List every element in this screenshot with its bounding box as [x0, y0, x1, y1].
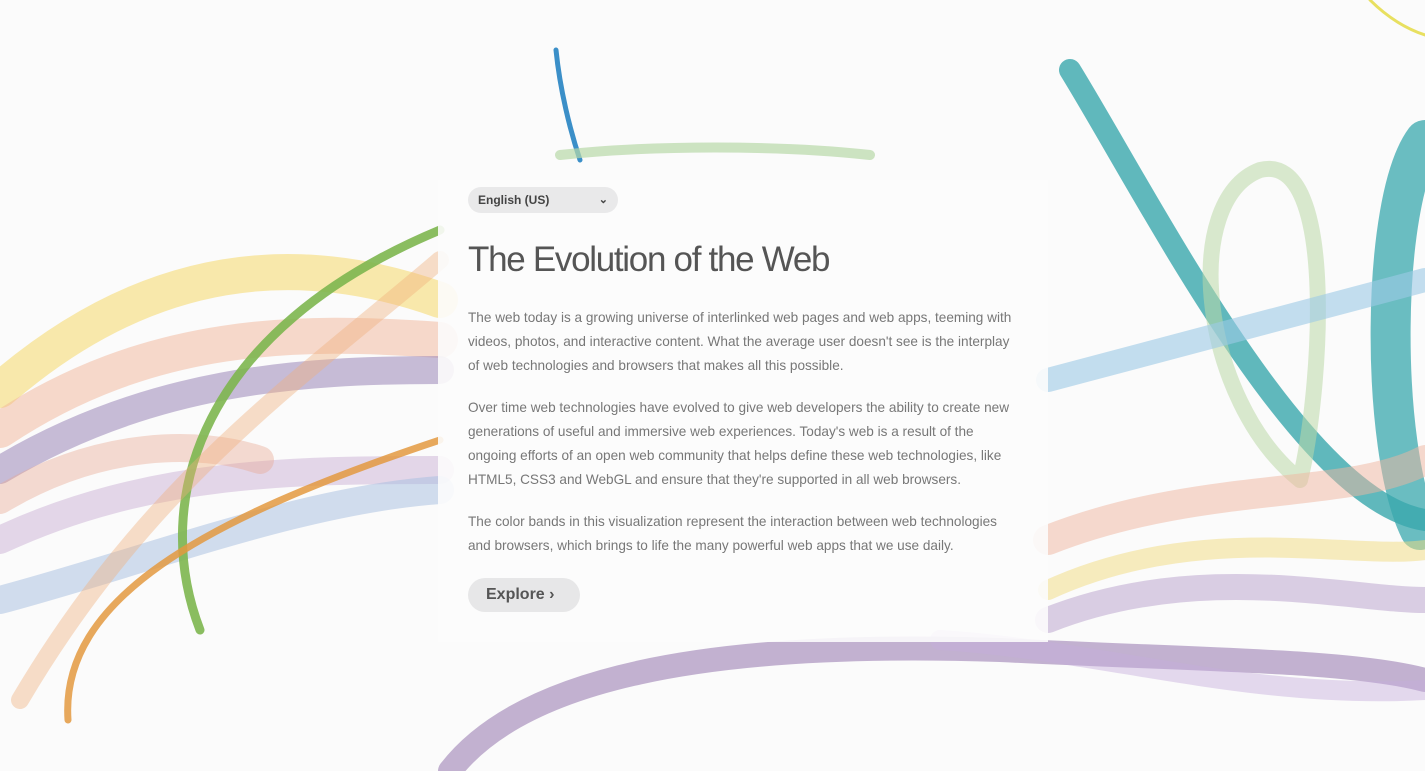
text block: intro paragraphs: ongoing efforts of an open web community that helps define these web technologies, like: [468, 448, 1001, 463]
text block: intro paragraphs: The color bands in this visualization represent the interaction between web technologies: [468, 514, 997, 529]
language selector: ⌄: [599, 194, 608, 206]
text block: intro paragraphs: The web today is a growing universe of interlinked web pages and web apps, teeming with: [468, 310, 1011, 325]
text block: intro paragraphs: of web technologies and browsers that makes all this possible.: [468, 358, 844, 373]
panel: intro: [438, 180, 1048, 642]
explore button: [468, 578, 580, 612]
language selector: English (US): [478, 193, 549, 207]
title: The Evolution of the Web: [468, 240, 829, 279]
text block: intro paragraphs: and browsers, which brings to life the many powerful web apps that we use daily.: [468, 538, 954, 553]
text block: intro paragraphs: videos, photos, and interactive content. What the average user doesn't see is the interplay: [468, 334, 1009, 349]
text block: intro paragraphs: HTML5, CSS3 and WebGL and ensure that they're supported in all web browsers.: [468, 472, 961, 487]
explore button: Explore ›: [486, 586, 554, 603]
text block: intro paragraphs: Over time web technologies have evolved to give web developers the ability to create new: [468, 400, 1009, 415]
language selector: [468, 187, 618, 213]
text block: intro paragraphs: [468, 310, 1011, 553]
text block: intro paragraphs: generations of useful and immersive web experiences. Today's web is a result of the: [468, 424, 974, 439]
